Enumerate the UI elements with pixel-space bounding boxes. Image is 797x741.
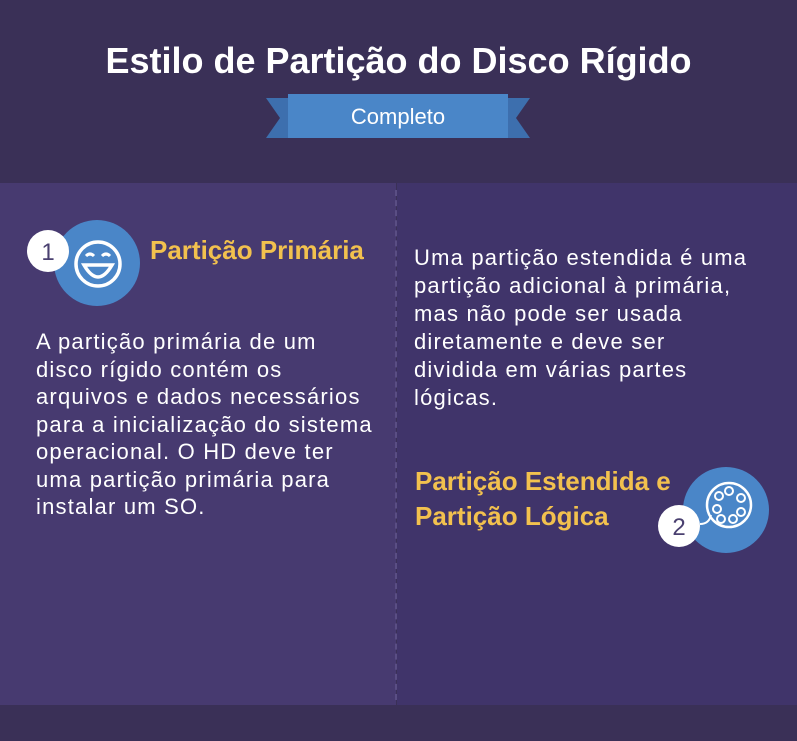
text: extended description: diretamente e deve ser	[414, 329, 665, 354]
icon: number 2 film reel: 2	[672, 514, 686, 541]
text: primary description: instalar um SO.	[36, 494, 206, 519]
heading: Partição Estendida e Lógica	[415, 466, 671, 531]
panel: left	[0, 183, 396, 705]
text: primary description	[36, 329, 373, 519]
heading: Partição Primária: Partição Primária	[150, 235, 364, 265]
panel: right	[397, 183, 797, 705]
text: extended description	[414, 245, 747, 410]
ribbon: Completo: Completo	[351, 104, 445, 129]
heading: Partição Estendida e Lógica: Partição Estendida e	[415, 466, 671, 496]
text: extended description: mas não pode ser usada	[414, 301, 683, 326]
icon: number 2 film reel	[658, 467, 769, 553]
text: extended description: partição adicional à primária,	[414, 273, 731, 298]
text: extended description: dividida em várias partes	[414, 357, 687, 382]
heading: Partição Estendida e Lógica: Partição Lógica	[415, 501, 609, 531]
text: primary description: arquivos e dados necessários	[36, 384, 361, 409]
text: extended description: Uma partição estendida é uma	[414, 245, 747, 270]
title: Estilo de Partição do Disco Rígido	[105, 40, 692, 81]
icon: number 1 smiley: 1	[41, 239, 55, 266]
ribbon: Completo	[266, 94, 530, 138]
text: primary description: disco rígido contém os	[36, 356, 283, 382]
text: primary description: operacional. O HD deve ter	[36, 439, 334, 464]
icon: number 1 smiley	[27, 220, 140, 306]
text: primary description: uma partição primária para	[36, 466, 330, 492]
text: primary description: para a inicialização do sistema	[36, 412, 373, 436]
text: primary description: A partição primária de um	[36, 329, 317, 354]
text: extended description: lógicas.	[414, 385, 498, 410]
